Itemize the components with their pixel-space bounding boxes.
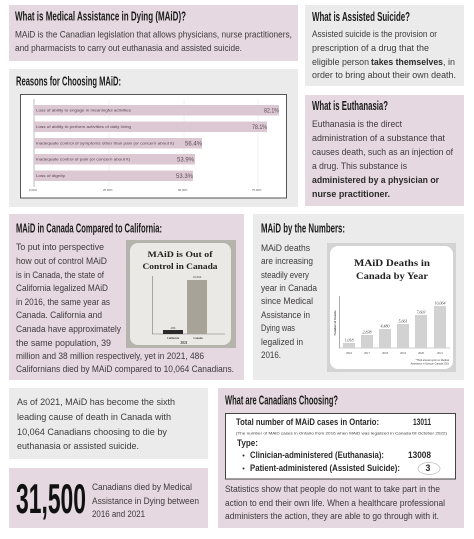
- text: deaths increasing: since Medical: [261, 296, 313, 306]
- text: California comparison: Californians died by MAiD compared to 10,064 Canadians.: [16, 364, 234, 374]
- text: deaths increasing: year in Canada: [261, 283, 317, 293]
- text: assisted suicide definition: , in: [443, 57, 455, 67]
- bar chart: reasons: 56.4%: [185, 140, 202, 148]
- text: euthanasia definition: a drug. This substance is: [312, 161, 408, 171]
- panel: euthanasia: [305, 95, 464, 206]
- chart: MAiD deaths by year: 2019: [400, 351, 406, 355]
- table: Ontario MAiD cases: (The number of MAiD cases in Ontario from 2016 when MAiD was legalized in Canada till October 2022): [236, 432, 448, 436]
- text: sixth leading cause of death: [17, 397, 175, 451]
- bar chart: reasons: 75.00%: [252, 188, 262, 192]
- text: Canadians died: 2016 and 2021: [92, 509, 145, 519]
- bar chart: reasons: Inadequate control of symptoms other than pain (or concern about it): [36, 142, 175, 146]
- chart: MAiD deaths by year: 2,838: [362, 330, 372, 336]
- text: California comparison: [16, 242, 234, 374]
- text: assisted suicide definition: Assisted suicide is the provision or: [312, 29, 437, 39]
- bar chart: reasons: 25.00%: [103, 188, 113, 192]
- bar chart: reasons: 53.9%: [177, 156, 194, 164]
- chart: MAiD out of control in Canada: MAiD is Out of: [148, 249, 213, 259]
- text: California comparison: Canada have approximately: [16, 324, 122, 334]
- bar chart: reasons: 50.00%: [178, 188, 188, 192]
- text: assisted suicide definition: takes themselves: [371, 57, 443, 67]
- table: Ontario MAiD cases: Type:: [237, 438, 258, 448]
- text: MAiD definition: [15, 30, 292, 53]
- chart: MAiD deaths by year: *Third annual report on Medical: [416, 359, 449, 362]
- chart: MAiD deaths by year: 2016: [346, 351, 352, 355]
- text: sixth leading cause of death: leading cause of death in Canada with: [17, 412, 171, 422]
- chart: MAiD out of control in Canada: 2021: [180, 341, 188, 345]
- chart: MAiD deaths by year: 10,064: [434, 300, 446, 306]
- text: deaths increasing: legalized in: [261, 337, 303, 347]
- chart: MAiD deaths by year: 7,603: [416, 310, 426, 316]
- text: California comparison: million and 38 million respectively, yet in 2021, 486: [16, 351, 204, 361]
- panel: what are Canadians choosing: [218, 388, 464, 528]
- text: euthanasia definition: administration of a substance that: [312, 133, 446, 143]
- bar chart: reasons: [20, 94, 286, 198]
- panel: assisted suicide: [305, 5, 464, 86]
- table: Ontario MAiD cases: Clinician-administered (Euthanasia):: [250, 450, 384, 460]
- panel: MAiD by the numbers: [253, 214, 464, 380]
- bar chart: reasons: Loss of ability to engage in meaningful activities: [36, 108, 131, 112]
- heading: reasons: Reasons for Choosing MAiD:: [16, 74, 121, 88]
- text: deaths increasing: steadily every: [261, 270, 310, 280]
- text: deaths increasing: MAiD deaths: [261, 243, 311, 253]
- text: deaths increasing: Dying was: [261, 323, 295, 333]
- table: Ontario MAiD cases: 3: [426, 463, 431, 473]
- text: Canadians died: Canadians died by Medical: [92, 482, 192, 492]
- heading: assisted suicide: What is Assisted Suicide?: [312, 10, 410, 24]
- text: Canadians died: Assistance in Dying between: [92, 496, 199, 506]
- text: assisted suicide definition: prescription of a drug that the: [312, 43, 429, 53]
- chart: MAiD out of control in Canada: 486: [171, 326, 176, 330]
- chart: MAiD out of control in Canada: California: [167, 337, 180, 340]
- text: Canadians died: [92, 482, 199, 519]
- text: deaths increasing: 2016.: [261, 350, 281, 360]
- text: assisted suicide definition: [312, 29, 456, 80]
- bar chart: reasons: 82.1%: [264, 108, 279, 114]
- bar chart: reasons: 0.00%: [29, 188, 37, 192]
- text: euthanasia definition: causes death, such as an injection of: [312, 147, 454, 157]
- text: euthanasia definition: [312, 119, 454, 199]
- text: California comparison: To put into perspective: [16, 242, 104, 252]
- chart: MAiD deaths by year: 1,018: [344, 338, 354, 344]
- text: MAiD definition: and pharmacists to carry out euthanasia and assisted suicide.: [15, 43, 242, 53]
- chart: MAiD deaths by year: 5,661: [398, 318, 408, 324]
- text: statistics explanation: Statistics show that people do not want to take part in the: [225, 484, 440, 494]
- panel: sixth leading cause: [9, 388, 208, 459]
- chart: MAiD deaths by year: [327, 243, 456, 372]
- text: California comparison: California legalized MAiD: [16, 283, 108, 293]
- chart: MAiD deaths by year: Number of Deaths: [333, 310, 337, 335]
- text: California comparison: Canada. California and: [16, 310, 102, 320]
- heading: by the numbers: MAiD by the Numbers:: [261, 222, 345, 236]
- text: euthanasia definition: nurse practitioner.: [312, 189, 390, 199]
- text: California comparison: in 2016, the same year as: [16, 297, 111, 307]
- text: California comparison: the same population, 39: [16, 338, 111, 348]
- chart: MAiD deaths by year: Canada by Year: [356, 272, 429, 282]
- table: Ontario MAiD cases: Patient-administered (Assisted Suicide):: [250, 463, 400, 473]
- text: sixth leading cause of death: As of 2021, MAiD has become the sixth: [17, 397, 175, 407]
- bar chart: reasons: 53.3%: [176, 173, 193, 180]
- text: California comparison: how out of control MAiD: [16, 256, 107, 266]
- text: statistics explanation: administers the action, they are able to go through with it.: [225, 511, 439, 521]
- panel: Canada compared to California: [9, 214, 244, 380]
- text: deaths increasing: Assistance in: [261, 310, 310, 320]
- chart: MAiD deaths by year: 2020: [418, 351, 424, 355]
- table: Ontario MAiD cases: Total number of MAiD cases in Ontario:: [236, 417, 379, 427]
- big number: 31,500: [16, 475, 86, 522]
- bar chart: reasons: Inadequate control of pain (or concern about it): [36, 158, 131, 162]
- text: deaths increasing: are increasing: [261, 256, 313, 266]
- heading: Canada compared to California: MAiD in Canada Compared to California:: [16, 222, 162, 236]
- chart: MAiD out of control in Canada: Control in Canada: [142, 261, 218, 271]
- text: sixth leading cause of death: euthanasia or assisted suicide.: [17, 441, 139, 451]
- heading: euthanasia: What is Euthanasia?: [312, 99, 388, 113]
- heading: what is MAiD: What is Medical Assistance in Dying (MAiD)?: [15, 10, 186, 24]
- chart: MAiD deaths by year: MAiD Deaths in: [354, 259, 431, 269]
- panel: reasons for choosing MAiD: [9, 69, 298, 207]
- text: assisted suicide definition: order to bring about their own death.: [312, 70, 456, 80]
- table: Ontario MAiD cases: 13011: [413, 417, 431, 427]
- chart: MAiD deaths by year: 2017: [364, 351, 370, 355]
- table: Ontario MAiD cases: [226, 414, 456, 479]
- text: euthanasia definition: Euthanasia is the direct: [312, 119, 403, 129]
- chart: MAiD out of control in Canada: Canada: [193, 337, 203, 340]
- text: assisted suicide definition: eligible person: [312, 57, 369, 67]
- text: euthanasia definition: administered by a physician or: [312, 175, 440, 185]
- text: deaths increasing: [261, 243, 317, 360]
- panel: 31,500 statistic: [9, 468, 208, 528]
- panel: what is MAiD: [9, 5, 298, 61]
- bar chart: reasons: Loss of dignity: [36, 174, 65, 178]
- text: statistics explanation: action to end their own life. When a healthcare professional: [225, 498, 445, 508]
- text: MAiD definition: MAiD is the Canadian legislation that allows physicians, nurse practitioners,: [15, 30, 292, 40]
- chart: MAiD deaths by year: Assistance in Dying in Canada 2021: [411, 362, 450, 366]
- chart: MAiD deaths by year: 4,480: [380, 324, 390, 330]
- table: Ontario MAiD cases: 13008: [408, 450, 431, 460]
- heading: what are Canadians choosing: What are Canadians Choosing?: [225, 394, 338, 408]
- chart: MAiD out of control in Canada: [126, 240, 236, 348]
- text: California comparison: is in Canada, the state of: [16, 270, 104, 280]
- chart: MAiD deaths by year: 2021: [437, 351, 444, 355]
- chart: MAiD out of control in Canada: 10,064: [193, 275, 202, 280]
- bar chart: reasons: 78.1%: [252, 124, 267, 131]
- chart: MAiD deaths by year: 2018: [382, 351, 388, 355]
- text: statistics explanation: [225, 484, 445, 521]
- text: sixth leading cause of death: 10,064 Canadians choosing to die by: [17, 427, 168, 437]
- bar chart: reasons: Loss of ability to perform activities of daily living: [36, 125, 131, 129]
